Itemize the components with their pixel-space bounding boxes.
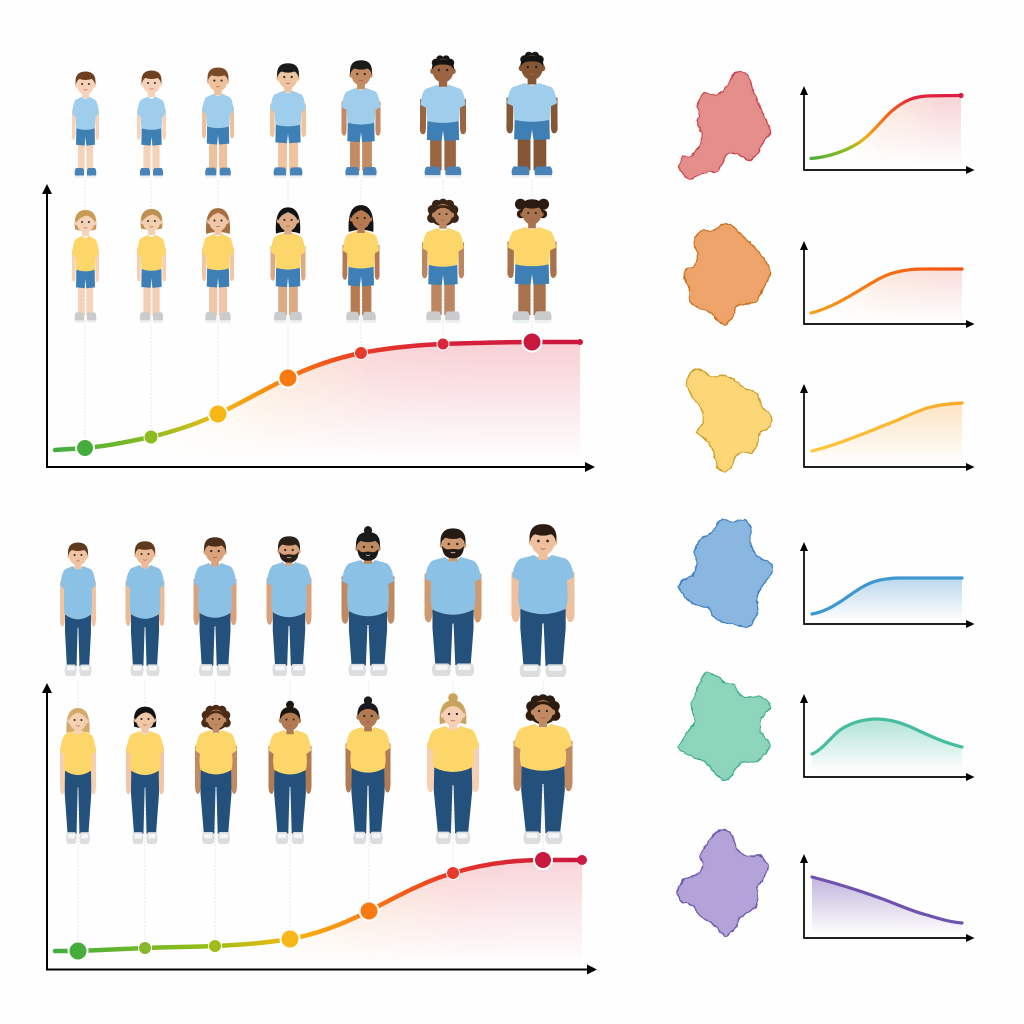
panel: adults growth chart	[42, 680, 597, 974]
blob: green	[677, 671, 772, 782]
figure: woman 4	[268, 701, 312, 844]
figure: woman 2	[126, 707, 164, 844]
figure: man 1	[60, 542, 96, 676]
mini chart: purple curve	[800, 854, 974, 942]
mini chart: orange curve	[800, 241, 974, 328]
blob: red	[677, 70, 772, 181]
figure: woman 5	[345, 696, 391, 844]
figure: woman 7	[513, 694, 573, 844]
curve markers	[68, 851, 587, 960]
figure: woman 6	[427, 693, 479, 844]
figure: girl 3	[202, 208, 234, 323]
figure: boy 6	[420, 55, 466, 178]
axes	[42, 683, 597, 974]
figure: girl 7	[507, 199, 557, 323]
growth curve	[55, 860, 582, 951]
figure: boy 1	[72, 72, 99, 178]
growth curve	[55, 342, 580, 450]
blob: purple	[676, 828, 770, 938]
figure: girl 4	[270, 207, 306, 323]
figure: man 7	[511, 524, 575, 677]
area under children curve	[220, 344, 580, 439]
figure: boy 5	[341, 60, 381, 178]
figure: woman 3	[195, 705, 237, 844]
figure: man 6	[424, 528, 482, 676]
figure: girl 5	[342, 205, 380, 323]
mini chart: yellow curve	[800, 384, 974, 471]
figure: boy 3	[202, 67, 234, 178]
figure: girl 6	[422, 199, 464, 323]
figure: man 3	[193, 537, 237, 676]
area under adults curve	[305, 862, 582, 948]
axes	[42, 184, 595, 472]
panel: children growth chart	[42, 180, 595, 472]
mini chart: green curve	[800, 694, 974, 781]
figure: boy 4	[270, 63, 306, 178]
blob: orange	[683, 223, 772, 327]
blob: blue	[677, 518, 773, 629]
mini chart: red curve	[800, 86, 974, 174]
figure: girl 2	[137, 209, 166, 323]
figure: woman 1	[60, 708, 96, 844]
guide lines	[78, 680, 543, 948]
blob: yellow	[684, 367, 773, 474]
curve markers	[76, 332, 583, 457]
figure: man 5	[341, 526, 395, 676]
figure: boy 7	[506, 52, 558, 178]
figure: man 4	[266, 536, 312, 676]
figure: girl 1	[72, 210, 99, 323]
figure: boy 2	[137, 70, 166, 178]
figure: man 2	[125, 541, 165, 676]
guide lines	[85, 180, 532, 445]
mini chart: blue curve	[800, 542, 974, 628]
